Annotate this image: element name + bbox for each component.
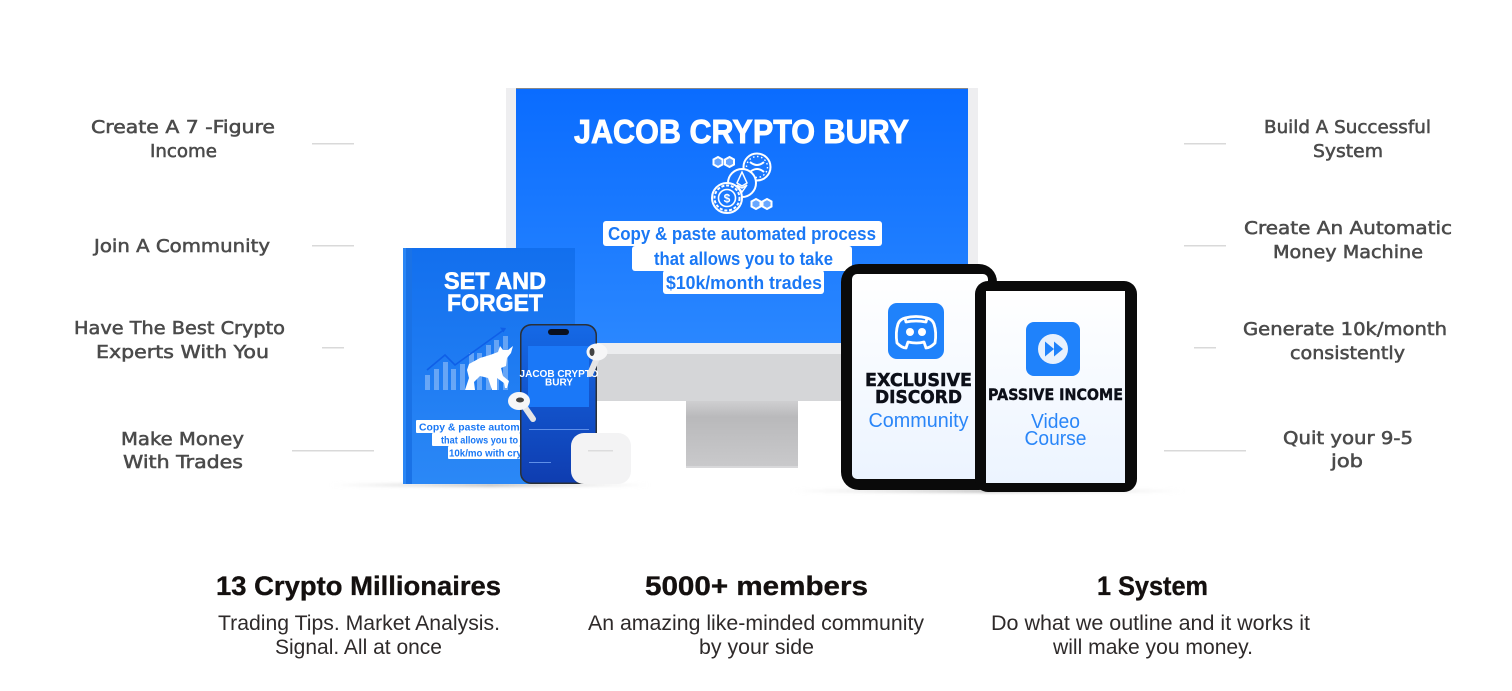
airpod right	[586, 344, 608, 374]
label: Create An Automatic Money Machine: Money Machine	[1273, 242, 1423, 263]
label: Make Money With Trades: With Trades	[123, 452, 243, 473]
ground shadow: left products	[330, 483, 650, 487]
monitor chin	[590, 343, 850, 401]
tablet: Exclusive Discord Community	[841, 264, 997, 490]
label: Have The Best Crypto Experts With You: Experts With You	[96, 342, 269, 363]
stat heading: 5000+ members	[645, 571, 868, 601]
tablet heading: EXCLUSIVE	[865, 370, 972, 391]
ebook subtitle pills: Copy & paste automated	[419, 422, 541, 434]
stat: 13 Crypto Millionaires	[216, 571, 501, 659]
screen headline pills: Copy & paste automated process	[608, 224, 876, 244]
screen title: JACOB CRYPTO BURY	[574, 113, 909, 150]
desktop monitor	[506, 88, 978, 468]
stat description: Signal. All at once	[275, 636, 442, 659]
stat description: Trading Tips. Market Analysis.	[218, 612, 500, 635]
screen headline pills: that allows you to take	[654, 249, 833, 269]
tablet subheading: Video	[1031, 411, 1080, 433]
ground shadow: right products	[790, 489, 1185, 493]
label: Create An Automatic Money Machine	[1244, 218, 1452, 263]
stat description: by your side	[699, 636, 814, 659]
phone album card	[528, 346, 589, 407]
phone card title	[520, 369, 599, 388]
right benefit labels	[1164, 117, 1452, 472]
label: Quit your 9-5 job: Quit your 9-5	[1283, 428, 1413, 449]
ebook subtitle pills: that allows you to make	[441, 434, 544, 446]
airpod left	[508, 392, 533, 419]
label: Make Money With Trades	[121, 429, 244, 473]
stat description	[218, 612, 500, 659]
stat heading: 1 System	[1097, 571, 1208, 601]
tablet subheading	[1024, 411, 1086, 450]
stat heading: 13 Crypto Millionaires	[216, 571, 501, 601]
icon: crypto coins	[712, 154, 772, 213]
tablet heading: DISCORD	[875, 387, 962, 408]
tablet subheading: Course	[1024, 428, 1086, 450]
stat description	[991, 612, 1310, 659]
stat description	[588, 612, 925, 659]
screen headline pills	[603, 221, 882, 294]
icon: fast-forward	[1026, 322, 1080, 376]
ebook title: SET AND	[444, 268, 546, 295]
label: Build A Successful System: Build A Successful	[1264, 117, 1431, 138]
label: Create A 7-Figure Income	[91, 117, 275, 162]
label: Build A Successful System: System	[1313, 141, 1383, 162]
stat description: will make you money.	[1052, 636, 1253, 659]
label: Quit your 9-5 job: job	[1330, 451, 1363, 472]
screen headline pills: $10k/month trades	[666, 273, 822, 293]
stat description: An amazing like-minded community	[588, 612, 925, 635]
ebook subtitle pills	[416, 420, 544, 460]
label: Generate 10k/month consistently: consistently	[1290, 343, 1405, 364]
ebook title: FORGET	[447, 290, 543, 317]
label: Make Money With Trades: Make Money	[121, 429, 244, 450]
bar chart with arrow and bull	[425, 328, 513, 390]
monitor stand	[686, 401, 798, 468]
icon: crypto coins: $	[724, 192, 731, 206]
stat: 1 System	[991, 571, 1310, 659]
label: Build A Successful System	[1264, 117, 1431, 162]
tablet: Passive Income Video Course	[975, 281, 1137, 492]
tablet subheading: Community	[868, 410, 968, 432]
stat: 5000+ members	[588, 571, 925, 659]
smartphone	[520, 324, 599, 484]
label: Generate 10k/month consistently: Generate 10k/month	[1243, 319, 1447, 340]
label: Have The Best Crypto Experts With You	[74, 318, 285, 363]
ebook: Set and Forget	[403, 248, 575, 484]
stat description: Do what we outline and it works it	[991, 612, 1310, 635]
icon: discord	[888, 303, 944, 359]
label: Create A 7-Figure Income: Income	[150, 141, 217, 162]
label: Create An Automatic Money Machine: Create An Automatic	[1244, 218, 1452, 239]
label: Have The Best Crypto Experts With You: Have The Best Crypto	[74, 318, 285, 339]
ebook subtitle pills: 10k/mo with crypto	[449, 448, 537, 460]
label: Create A 7-Figure Income: Create A 7 -Figure	[91, 117, 275, 138]
tablet heading	[865, 370, 972, 408]
left benefit labels	[74, 117, 374, 473]
label: Generate 10k/month consistently	[1243, 319, 1447, 364]
phone card title: BURY	[545, 378, 573, 388]
monitor screen	[516, 89, 968, 344]
airpods case	[571, 433, 631, 484]
label: Join A Community: Join A Community	[93, 236, 270, 257]
tablet heading: PASSIVE INCOME	[988, 385, 1123, 404]
ebook title	[444, 268, 546, 317]
phone card title: JACOB CRYPTO	[520, 369, 599, 380]
airpods	[508, 344, 631, 484]
label: Quit your 9-5 job	[1283, 428, 1413, 472]
phone progress bars	[529, 429, 589, 463]
